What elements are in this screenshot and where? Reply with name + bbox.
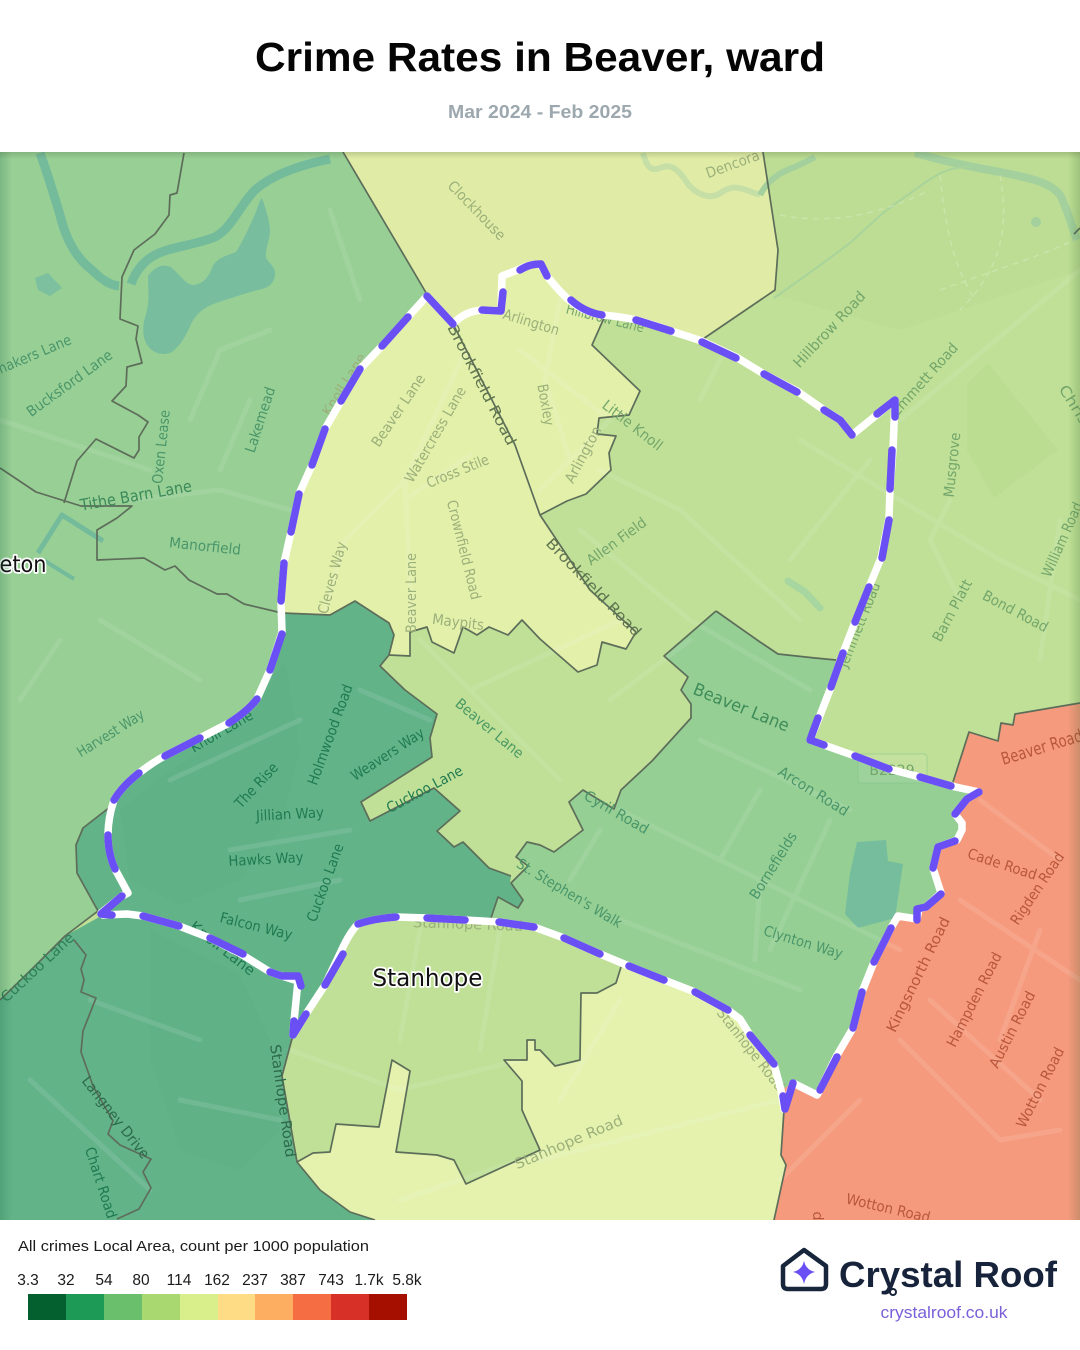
street labels: central yellow area — [316, 148, 762, 640]
street labels: north-west: Oxen Lease — [150, 409, 174, 485]
legend tick labels: 54 — [95, 1272, 113, 1289]
street labels: medium green area: St. Stephen's Walk — [513, 856, 625, 932]
street labels: dark green area: The Rise — [231, 760, 282, 813]
area: southern yellow — [297, 966, 786, 1220]
road shield: B2229: B2229 — [869, 763, 915, 779]
street labels: Stanhope: Stanhope Road — [713, 1006, 787, 1094]
ward boundary: white line — [101, 264, 979, 1109]
street labels: dark green area: Weavers Way — [348, 725, 428, 785]
legend tick labels: 387 — [280, 1272, 306, 1289]
logo: Crystal Roof — [783, 1250, 1058, 1322]
water: rivers and lakes — [35, 153, 1077, 928]
area: dark green north — [76, 601, 523, 1035]
street labels: north-east: Bond Road — [979, 588, 1051, 636]
street labels: central yellow area: Knoll Lane — [320, 351, 370, 419]
street labels: central yellow area: Dencora — [704, 148, 762, 182]
legend title: All crimes Local Area, count per 1000 population — [18, 1238, 369, 1255]
street labels: red area: Wotton Road — [844, 1192, 932, 1226]
street labels: medium green area: Arcon Road — [775, 764, 851, 820]
street labels: dark green area: Langney Drive — [78, 1074, 152, 1162]
street labels: dark green area: Knoll Lane — [188, 708, 256, 756]
street labels: dark green area: Cuckoo Lane — [304, 842, 348, 924]
street labels: central yellow area: Beaver Lane — [404, 553, 420, 633]
legend colour scale — [28, 1294, 407, 1320]
legend — [17, 1238, 422, 1320]
street labels: north-east: Emmett Road — [888, 340, 962, 420]
website url: crystalroof.co.uk — [880, 1304, 1008, 1322]
street labels: Stanhope — [413, 915, 787, 1173]
legend tick labels: 3.3 — [17, 1272, 39, 1289]
street labels: dark green area: Jillian Way — [255, 805, 325, 825]
street labels: dark green area: Falcon Way — [218, 910, 294, 944]
title: Crime Rates in Beaver, ward — [255, 34, 825, 80]
street labels: north-east: Jemmett Road — [835, 580, 884, 671]
street labels: red area: Austin Road — [987, 989, 1039, 1071]
street labels: dark green area: Knoll Lane — [186, 919, 258, 979]
street labels: dark green area: Holmwood Road — [305, 682, 357, 788]
street labels: medium green area: Clynton Way — [761, 923, 845, 963]
street labels: dark green area: Stanhope Road — [266, 1043, 298, 1159]
street labels: red area: Cade Road — [965, 846, 1039, 884]
icon: house with star — [783, 1250, 826, 1289]
area: left green — [0, 152, 428, 1000]
map base: light green areas — [0, 152, 1080, 1220]
legend tick labels: 1.7k — [354, 1272, 384, 1289]
street labels: medium green area: Cyril Road — [581, 788, 651, 838]
street labels: north-east: Hillbrow Lane — [564, 302, 646, 336]
street labels: red area: Wotton Road — [1014, 1045, 1068, 1131]
street labels: north-west: Bucksford Lane — [24, 348, 116, 420]
legend tick labels: 5.8k — [392, 1272, 422, 1289]
place label: town fragment: eton — [0, 552, 46, 578]
street labels: north-east — [564, 289, 1080, 671]
area: northern yellow — [343, 152, 778, 339]
street labels: dark green area: Chart Road — [81, 1145, 119, 1221]
street labels: dark green area: Hawks Way — [228, 850, 304, 870]
street labels: central yellow area: Maypits — [431, 612, 485, 634]
key dot on wordmark — [890, 1289, 896, 1295]
street labels: dark green area — [78, 682, 466, 1221]
street labels: red area: Rigden Road — [1008, 850, 1068, 928]
street labels: red area: d — [809, 1211, 825, 1221]
street labels: north-east: Hillbrow Road — [791, 289, 869, 371]
street labels: central yellow area: Cross Stile — [424, 452, 492, 492]
street labels: central yellow area: Beaver Lane — [369, 372, 429, 450]
street labels: Stanhope: Stanhope Road — [413, 915, 523, 935]
street labels: north-west: Tithe Barn Lane — [78, 476, 193, 515]
street labels: central yellow area: Watercress Lane — [402, 384, 470, 486]
street labels: central yellow area: Crownfield Road — [443, 499, 483, 601]
choropleth map — [0, 148, 1080, 1226]
legend tick labels — [17, 1272, 422, 1289]
street labels: medium green area — [452, 680, 851, 963]
legend tick labels: 237 — [242, 1272, 268, 1289]
street labels: central yellow area: Clockhouse — [444, 178, 508, 244]
street labels: medium green area: Beaver Lane — [452, 696, 526, 762]
street labels: dark green area: Cuckoo Lane — [384, 763, 466, 817]
street labels: Stanhope: Stanhope Road — [512, 1113, 626, 1173]
legend tick labels: 743 — [318, 1272, 344, 1289]
street labels: north-west: Manorfield — [168, 535, 242, 559]
street labels: central yellow area: Arlington — [562, 424, 606, 486]
wordmark: Crystal Roof — [839, 1254, 1058, 1295]
street labels: north-west: Lakemead — [243, 385, 279, 455]
legend tick labels: 114 — [167, 1272, 192, 1289]
street labels: medium green area: Bornefields — [747, 830, 801, 902]
legend tick labels: 162 — [204, 1272, 230, 1289]
street labels: medium green area: Beaver Lane — [690, 680, 792, 736]
boundary lines between areas — [0, 152, 1080, 1220]
area: central yellow — [281, 264, 640, 672]
area: medium green — [491, 611, 979, 1095]
area: dark green south-west — [0, 915, 375, 1220]
street labels: north-west — [0, 332, 279, 1006]
street labels: central yellow area: Arlington — [501, 307, 561, 339]
subtitle: date range: Mar 2024 - Feb 2025 — [448, 102, 632, 122]
street labels: north-west: Harvest Way — [75, 707, 148, 761]
street labels: red area: Kingsnorth Road — [884, 915, 954, 1035]
street labels: red area: Hampden Road — [944, 950, 1006, 1050]
street labels: north-east: Musgrove — [942, 432, 964, 498]
road shield: B2229 — [858, 754, 927, 783]
street labels: central yellow area: Boxley — [533, 383, 557, 427]
street labels: north-east: Allen Field — [584, 515, 650, 569]
area: red high crime — [774, 703, 1080, 1220]
street labels: north-west: Cuckoo Lane — [0, 930, 78, 1006]
street labels: central yellow area: Brookfield Road — [542, 536, 644, 640]
legend tick labels: 80 — [132, 1272, 150, 1289]
street labels: central yellow area: Cleves Way — [316, 540, 350, 616]
street labels: north-east: Little Knoll — [599, 398, 665, 454]
legend tick labels: 32 — [57, 1272, 75, 1289]
street labels: north-east: Barn Platt — [930, 577, 976, 645]
street labels: red area — [809, 726, 1080, 1226]
street labels: central yellow area: Brookfield Road — [443, 322, 519, 448]
street network — [0, 175, 1080, 1200]
place label: Stanhope: Stanhope — [372, 964, 482, 992]
ward boundary: purple dashes — [101, 264, 979, 1109]
